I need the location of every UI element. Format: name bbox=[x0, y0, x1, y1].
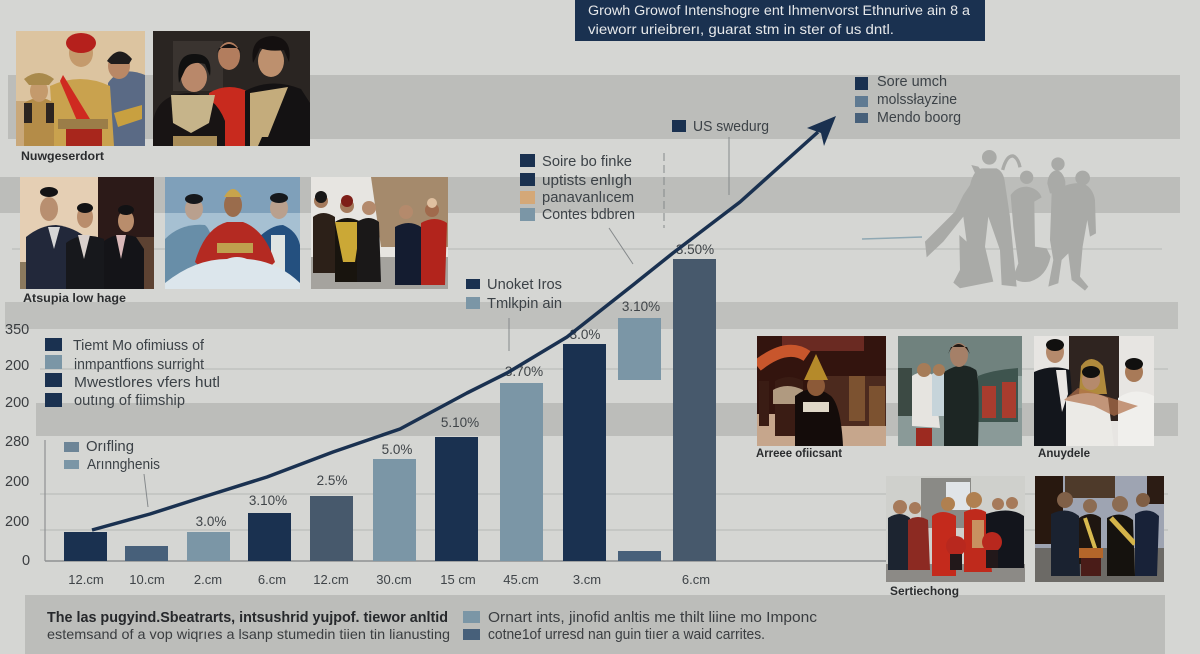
header banner bbox=[575, 0, 985, 41]
bar value labels bbox=[196, 242, 714, 529]
x axis labels: 2.cm bbox=[194, 572, 222, 587]
legend: three items upper right: Mendo boorg bbox=[877, 110, 961, 126]
legend: two items center: Unoket Iros bbox=[487, 277, 562, 293]
footer panel: Ornart ints, jinofid anltis me thilt liine mo Imponc bbox=[488, 610, 817, 626]
y axis labels: 200 bbox=[5, 358, 29, 374]
bar value labels: 3.10% bbox=[622, 299, 660, 314]
photo: couple and woman in embroidered dress bbox=[153, 31, 310, 146]
caption: Arreee ofiicsant bbox=[756, 448, 842, 460]
footer panel: cotne1of urresd nan guin tiıer a waid carrites. bbox=[488, 627, 765, 643]
y axis labels: 200 bbox=[5, 514, 29, 530]
header banner: Growh Growof Intenshogre ent Ihmenvorst Ethnurive ain 8 a bbox=[588, 3, 971, 18]
photo: five people in traditional dress bbox=[311, 177, 448, 289]
legend: four items upper center: panavanlıcem bbox=[542, 190, 634, 206]
legend: four items upper center: Contes bdbren bbox=[542, 207, 635, 223]
photo: three figures in military costume bbox=[16, 31, 145, 146]
x axis labels: 3.cm bbox=[573, 572, 601, 587]
caption: Sertiechong bbox=[890, 586, 959, 598]
x axis labels: 12.cm bbox=[68, 572, 104, 587]
footer panel bbox=[25, 595, 1165, 654]
bar value labels: 3.0% bbox=[570, 327, 600, 342]
y axis labels: 0 bbox=[22, 553, 30, 569]
legend: US label: US swedurg bbox=[693, 119, 769, 135]
legend: three items upper right bbox=[855, 74, 961, 126]
legend: four items left bbox=[45, 338, 220, 409]
legend: four items upper center bbox=[520, 153, 664, 264]
bar chart bbox=[45, 259, 886, 561]
x axis labels: 10.cm bbox=[129, 572, 165, 587]
legend: two items center bbox=[466, 277, 562, 351]
y axis labels: 350 bbox=[5, 322, 29, 338]
photo: three men in suits bbox=[20, 177, 154, 289]
bar value labels: 2.5% bbox=[317, 473, 347, 488]
legend: two items over chart: Arınnghenis bbox=[87, 457, 160, 473]
photo: three men in suit and white clothes bbox=[1034, 336, 1154, 446]
x axis labels: 15 cm bbox=[440, 572, 476, 587]
legend: three items upper right: molssłayzine bbox=[877, 92, 957, 108]
legend: two items center: Tmlkpin ain bbox=[487, 296, 562, 312]
bar value labels: 5.0% bbox=[382, 442, 412, 457]
photo: four figures before a dark doorway bbox=[1035, 476, 1164, 582]
teal accent line bbox=[862, 237, 922, 239]
silhouette: group of people bbox=[925, 150, 1096, 291]
photo: group in red robes bbox=[886, 478, 1025, 582]
legend: two items over chart: Orıfling bbox=[86, 439, 134, 455]
y axis labels: 200 bbox=[5, 395, 29, 411]
caption: Anuydele bbox=[1038, 448, 1090, 460]
x axis labels: 12.cm bbox=[313, 572, 349, 587]
bar value labels: 3.70% bbox=[505, 364, 543, 379]
y axis labels: 200 bbox=[5, 474, 29, 490]
header banner: vieworr urieibrerı, guarat stm in ster of us dntl. bbox=[588, 22, 894, 37]
legend: four items left: inmpantfions surright bbox=[74, 357, 204, 373]
legend: four items left: Mwestlores vfers hutl bbox=[74, 375, 220, 391]
footer panel: estemsand of a vop wiqrıes a lsanp stumedin tiien tin lianusting bbox=[47, 626, 450, 642]
bar value labels: 3.0% bbox=[196, 514, 226, 529]
footer panel: The las pugyind.Sbeatrarts, intsushrid yujpof. tiewor anltid bbox=[47, 610, 448, 626]
photo: man in black robe with attendants bbox=[898, 336, 1022, 446]
y axis labels: 280 bbox=[5, 434, 29, 450]
bar value labels: 3.50% bbox=[676, 242, 714, 257]
x axis labels: 6.cm bbox=[258, 572, 286, 587]
legend: US label bbox=[672, 119, 769, 195]
growth arrow bbox=[92, 116, 836, 530]
x axis labels: 6.cm bbox=[682, 572, 710, 587]
legend: four items left: Tiemt Mo ofimiuss of bbox=[73, 338, 205, 354]
legend: four items upper center: Soire bo finke bbox=[542, 154, 632, 170]
bar value labels: 3.10% bbox=[249, 493, 287, 508]
legend: two items over chart bbox=[64, 439, 160, 507]
x axis labels: 45.cm bbox=[503, 572, 539, 587]
y axis labels bbox=[5, 322, 30, 569]
photo: three figures on a white cloth bbox=[165, 177, 300, 289]
bar value labels: 5.10% bbox=[441, 415, 479, 430]
photo: ceremony hall procession bbox=[757, 336, 886, 446]
x axis labels bbox=[68, 572, 710, 587]
caption: Nuwgeserdort bbox=[21, 151, 104, 163]
x axis labels: 30.cm bbox=[376, 572, 412, 587]
caption: Atsupia low hage bbox=[23, 293, 126, 305]
legend: three items upper right: Sore umch bbox=[877, 74, 947, 90]
legend: four items left: outıng of fiimship bbox=[74, 393, 185, 409]
legend: four items upper center: uptists enlıgh bbox=[542, 173, 632, 189]
